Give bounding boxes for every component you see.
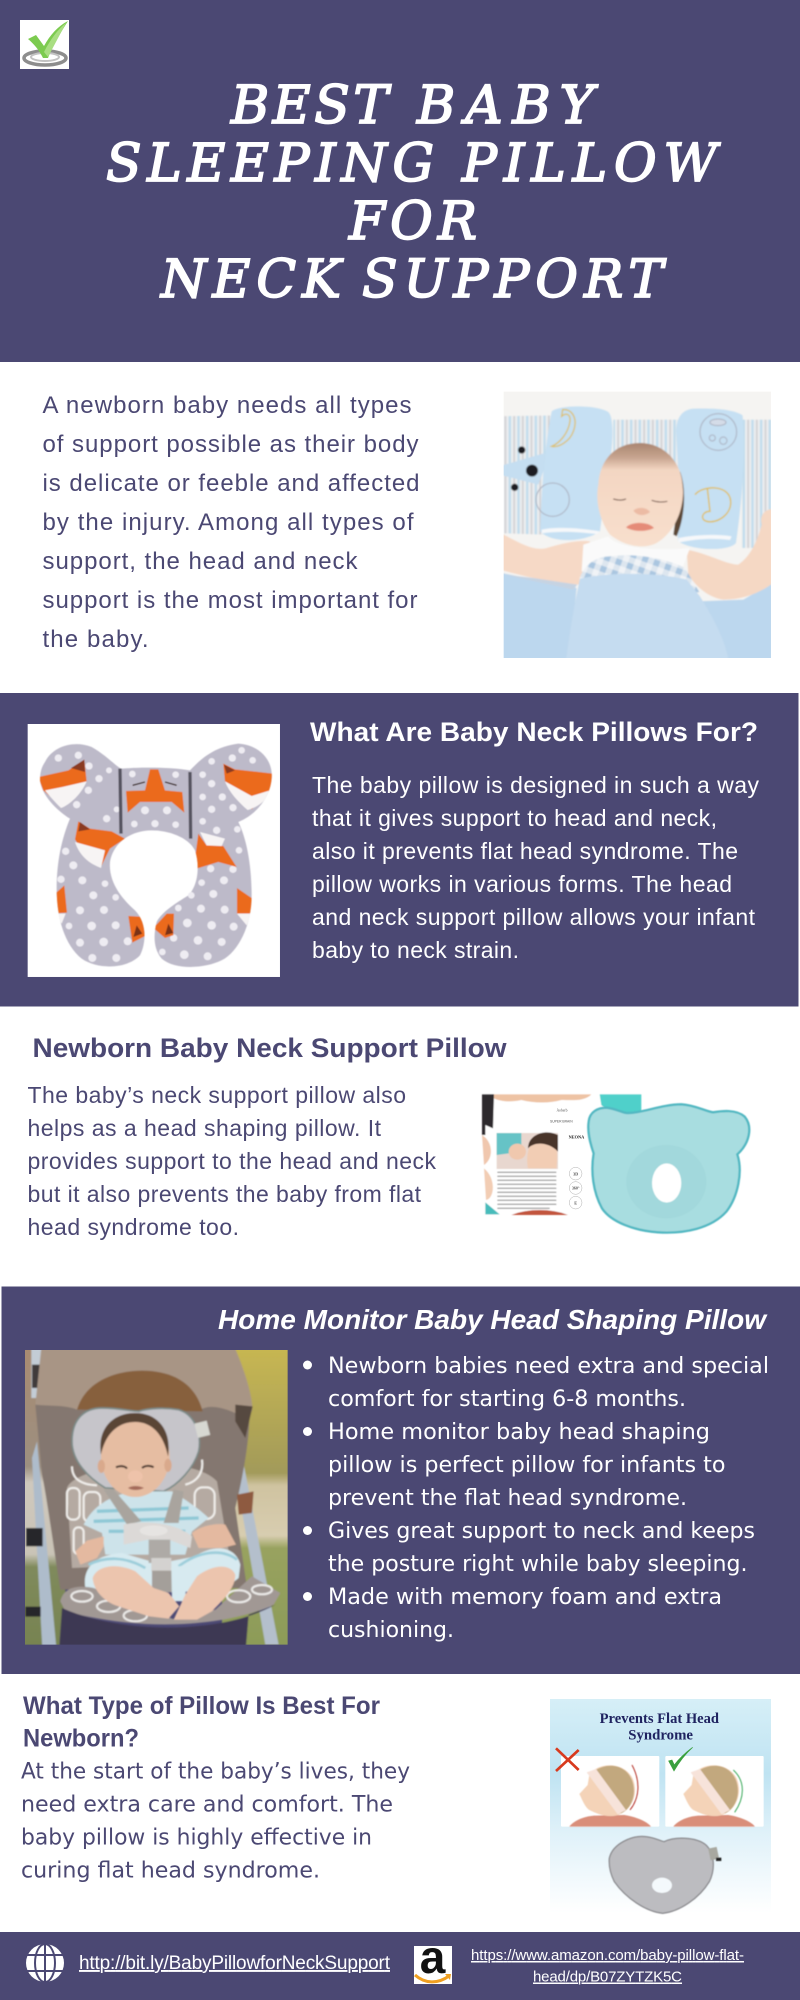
heading: what type of pillow is best: What Type of Pillow Is Best For: [23, 1692, 380, 1720]
heading: newborn baby neck support pillow: Newborn Baby Neck Support Pillow: [32, 1033, 508, 1063]
text block: neck support description: head syndrome too.: [28, 1214, 239, 1240]
heading: what type of pillow is best: Newborn?: [23, 1724, 139, 1752]
icon: amazon logo: [414, 1931, 452, 1984]
icon: green check mark: [20, 20, 69, 69]
panel: header banner: [0, 0, 800, 362]
text block: introduction: support is the most important for: [42, 587, 418, 614]
box label text: SUPER BRAIN: [550, 1119, 573, 1123]
text block: neck support description: helps as a head shaping pillow. It: [28, 1115, 382, 1141]
title: BEST: [230, 76, 391, 136]
panel: what are baby neck pillows for: [0, 693, 798, 1006]
link: amazon: head/dp/B07ZYTZK5C: [533, 1968, 682, 1986]
icon: globe: [26, 1944, 64, 1982]
text block: pillow works in various forms. The head: [312, 871, 732, 897]
panel: home monitor baby head shaping pillow: [2, 1286, 800, 1674]
green tick: [669, 1747, 693, 1771]
box label text: E: [574, 1200, 577, 1205]
image: prevents flat head syndrome: [550, 1699, 771, 1913]
text block: neck support description: but it also prevents the baby from flat: [28, 1181, 422, 1207]
title: FOR: [348, 192, 477, 252]
text block: best pillow for newborn: At the start of the baby’s lives, they: [21, 1758, 410, 1784]
title: BABY: [416, 76, 599, 136]
text block: also it prevents flat head syndrome. The: [312, 838, 738, 864]
title: NECK: [159, 250, 344, 310]
bullet list: prevent the flat head syndrome.: [328, 1485, 687, 1511]
text block: introduction: of support possible as their body: [42, 431, 418, 458]
text block: introduction: [42, 392, 420, 653]
text block: that it gives support to head and neck,: [312, 805, 717, 831]
image: sleeping baby between pillows: [504, 392, 771, 658]
text block: best pillow for newborn: baby pillow is highly effective in: [21, 1824, 372, 1850]
text block: introduction: by the injury. Among all types of: [42, 509, 414, 536]
title: SUPPORT: [362, 250, 666, 310]
text block: introduction: support, the head and neck: [42, 548, 358, 575]
text block: neck support description: [28, 1082, 436, 1240]
box label text: NEONA: [569, 1134, 585, 1139]
text block: neck support description: The baby’s neck support pillow also: [28, 1082, 406, 1108]
bullet markers: [303, 1360, 312, 1601]
bullet list: Made with memory foam and extra: [328, 1584, 722, 1610]
text block: neck support description: provides support to the head and neck: [28, 1148, 436, 1174]
bullet list: Gives great support to neck and keeps: [328, 1518, 755, 1544]
heading: Home Monitor Baby Head Shaping Pillow: [218, 1304, 768, 1335]
panel: footer links: [0, 1931, 800, 2000]
heading: What Are Baby Neck Pillows For?: [310, 717, 758, 747]
image caption: Syndrome: [628, 1727, 693, 1743]
bullet list: Newborn babies need extra and special: [328, 1353, 769, 1379]
text block: [312, 772, 760, 963]
link: amazon: [471, 1947, 744, 1986]
image caption: [600, 1711, 719, 1743]
bullet list: cushioning.: [328, 1617, 454, 1643]
title: [106, 76, 721, 310]
image caption: Prevents Flat Head: [600, 1711, 719, 1727]
bullet list: the posture right while baby sleeping.: [328, 1551, 748, 1577]
text block: best pillow for newborn: curing flat head syndrome.: [21, 1858, 320, 1884]
link: amazon: https://www.amazon.com/baby-pillow-flat-: [471, 1947, 744, 1964]
box label text: 360°: [572, 1186, 580, 1191]
text block: introduction: is delicate or feeble and affected: [42, 470, 420, 497]
bullet list: [303, 1353, 769, 1643]
bullet list: Home monitor baby head shaping: [328, 1419, 710, 1445]
icon: amazon logo: a: [420, 1931, 446, 1983]
text block: The baby pillow is designed in such a way: [312, 772, 760, 798]
title: PILLOW: [461, 134, 721, 194]
image: teal bear pillow and box: [482, 1094, 749, 1233]
text block: best pillow for newborn: need extra care and comfort. The: [21, 1792, 393, 1818]
text block: baby to neck strain.: [312, 937, 519, 963]
image: baby in stroller on head pillow: [25, 1350, 288, 1645]
heading: what type of pillow is best: [23, 1692, 380, 1752]
heart shaped pillow: [609, 1836, 721, 1913]
red cross: [556, 1748, 579, 1771]
image: fox neck pillow: [28, 724, 280, 977]
text block: and neck support pillow allows your infant: [312, 904, 756, 930]
box label text: [550, 1109, 585, 1205]
text block: best pillow for newborn: [21, 1758, 410, 1884]
text block: introduction: A newborn baby needs all types: [42, 392, 412, 419]
link: bit.ly: http://bit.ly/BabyPillowforNeckSupport: [79, 1953, 391, 1974]
box label text: Aoberb: [557, 1109, 568, 1113]
bullet list: comfort for starting 6-8 months.: [328, 1386, 686, 1412]
box label text: 3D: [573, 1171, 578, 1176]
bullet list: pillow is perfect pillow for infants to: [328, 1452, 726, 1478]
text block: introduction: the baby.: [42, 626, 148, 653]
title: SLEEPING: [106, 134, 434, 194]
